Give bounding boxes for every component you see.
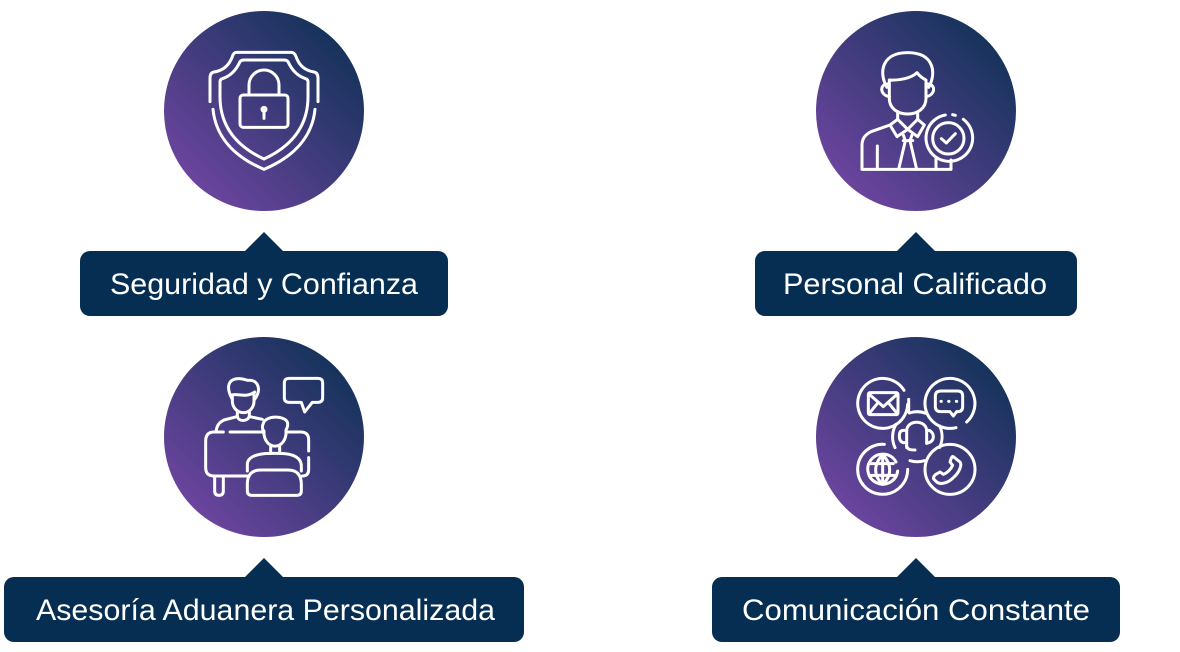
label: Asesoría Aduanera Personalizada [4, 558, 524, 642]
label: Comunicación Constante: Comunicación Constante [742, 594, 1090, 627]
panel: Asesoría Aduanera Personalizada [4, 337, 524, 642]
icon: shield with padlock [164, 11, 364, 211]
label: Asesoría Aduanera Personalizada: Asesoría Aduanera Personalizada [36, 594, 496, 627]
panel: Seguridad y Confianza [80, 11, 448, 316]
label: Seguridad y Confianza [80, 232, 448, 316]
label: Personal Calificado: Personal Calificado [783, 268, 1047, 301]
label: Seguridad y Confianza: Seguridad y Confianza [110, 268, 419, 301]
label: Personal Calificado [755, 232, 1077, 316]
icon: qualified professional with check badge [816, 11, 1016, 211]
panel: Personal Calificado [755, 11, 1077, 316]
icon: advisor and client at desk with speech bubble [164, 337, 364, 537]
panel: Comunicación Constante [712, 337, 1120, 642]
label: Comunicación Constante [712, 558, 1120, 642]
icon: communication channels around headset [816, 337, 1016, 537]
